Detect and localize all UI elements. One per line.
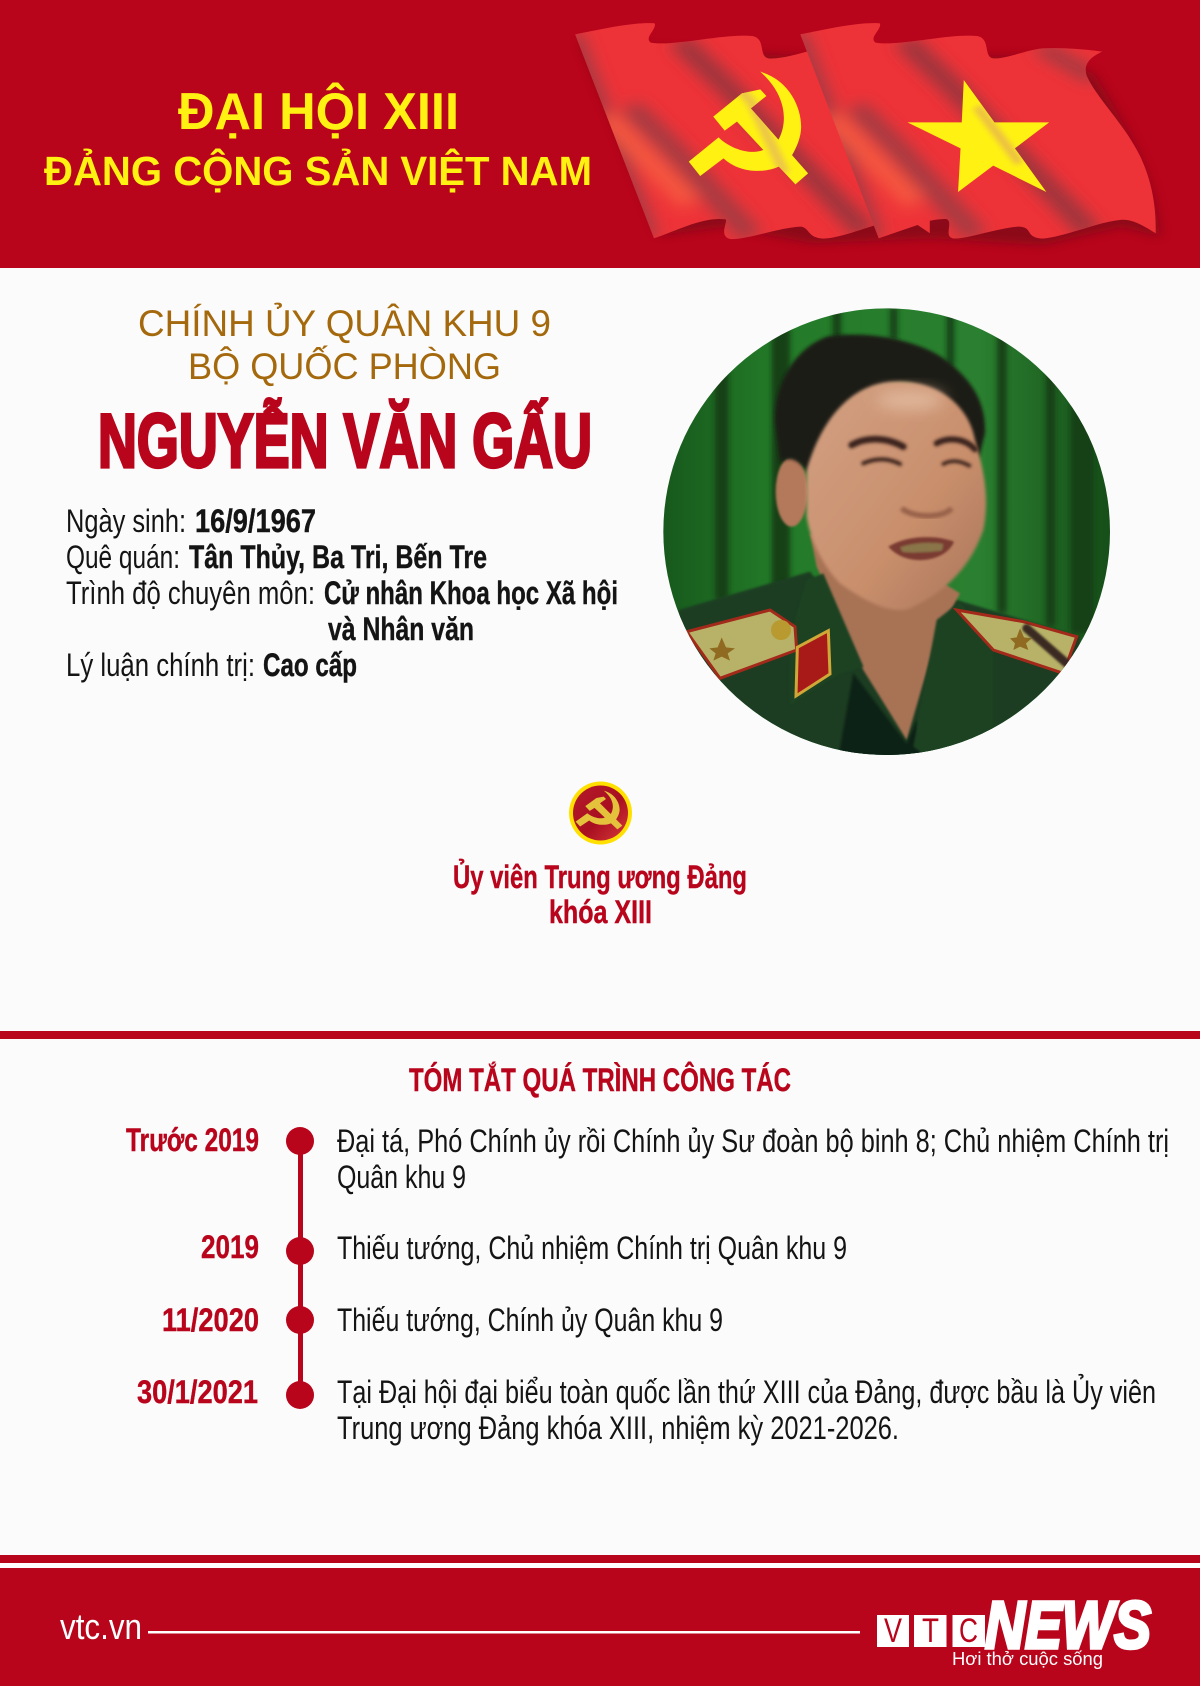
entry: before 2019: Quân khu 9 (337, 1159, 466, 1195)
entry: 2019: Thiếu tướng, Chủ nhiệm Chính trị Quân khu 9 (337, 1230, 847, 1266)
entry: 11/2020 (162, 1302, 723, 1338)
gold star (907, 80, 1049, 192)
hair (775, 335, 985, 473)
career timeline (126, 1122, 1169, 1446)
right epaulette (957, 610, 1077, 673)
left collar (814, 572, 864, 668)
eyebrows and eyes (852, 439, 975, 466)
entry: 2019: 2019 (201, 1229, 259, 1265)
central committee caption: khóa XIII (549, 894, 652, 930)
personal details: Cử nhân Khoa học Xã hội (324, 575, 618, 611)
personal details: và Nhân văn (328, 611, 474, 647)
VTC News logo: C (959, 1612, 978, 1650)
person name: NGUYỄN VĂN GẤU (98, 398, 592, 484)
header title: ĐẢNG CỘNG SẢN VIỆT NAM (44, 148, 592, 194)
header title: ĐẠI HỘI XIII (178, 82, 459, 141)
personal details: Ngày sinh: (66, 503, 186, 539)
flag shadow (580, 42, 1160, 245)
curtain folds (715, 307, 1094, 633)
personal details: 16/9/1967 (195, 503, 316, 539)
shirt opening (838, 674, 922, 755)
VTC News logo: V (884, 1612, 902, 1650)
neck (810, 533, 960, 740)
entry: before 2019 (126, 1122, 1169, 1195)
footer (0, 1568, 1200, 1686)
portrait photo (660, 305, 1113, 767)
personal details: Tân Thủy, Ba Tri, Bến Tre (189, 539, 487, 575)
entry: 11/2020: 11/2020 (162, 1302, 259, 1338)
party flag (575, 23, 930, 240)
VTC News logo: T (922, 1612, 939, 1650)
entry: 30/1/2021: 30/1/2021 (137, 1374, 258, 1410)
waving flags (560, 13, 1165, 247)
central committee caption: Ủy viên Trung ương Đảng (453, 859, 747, 895)
personal details: Quê quán: (66, 539, 180, 575)
entry: 11/2020: Thiếu tướng, Chính ủy Quân khu 9 (337, 1302, 723, 1338)
entry: 30/1/2021: Trung ương Đảng khóa XIII, nhiệm kỳ 2021-2026. (337, 1410, 899, 1446)
website: vtc.vn (60, 1606, 142, 1647)
collar tab (796, 631, 830, 696)
ear (776, 457, 808, 527)
personal details: Trình độ chuyên môn: (66, 575, 315, 611)
national flag (800, 23, 1156, 238)
VTC News logo: NEWS (985, 1588, 1151, 1663)
personal details (66, 503, 618, 683)
role heading: BỘ QUỐC PHÒNG (188, 345, 501, 387)
forehead highlight (877, 390, 943, 410)
personal details: Lý luận chính trị: (66, 647, 255, 683)
uniform (678, 572, 1080, 767)
role heading (138, 302, 551, 387)
career summary heading: TÓM TẮT QUÁ TRÌNH CÔNG TÁC (409, 1062, 791, 1098)
header title (44, 82, 592, 194)
nose (902, 508, 952, 516)
entry: 30/1/2021 (137, 1374, 1156, 1446)
central committee caption (453, 859, 747, 930)
communist party hammer and sickle (689, 72, 808, 184)
entry: before 2019: Trước 2019 (126, 1122, 259, 1158)
header banner (0, 0, 1200, 268)
right collar (913, 604, 991, 752)
VTC News logo: Hơi thở cuộc sống (952, 1649, 1103, 1669)
role heading: CHÍNH ỦY QUÂN KHU 9 (138, 302, 551, 344)
mouth (888, 537, 954, 560)
timeline line (298, 1141, 303, 1395)
VTC News logo (877, 1588, 1151, 1669)
party emblem badge (569, 782, 632, 844)
personal details: Cao cấp (263, 647, 357, 683)
entry: 2019 (201, 1229, 847, 1266)
face (807, 381, 986, 610)
left epaulette (687, 610, 797, 678)
